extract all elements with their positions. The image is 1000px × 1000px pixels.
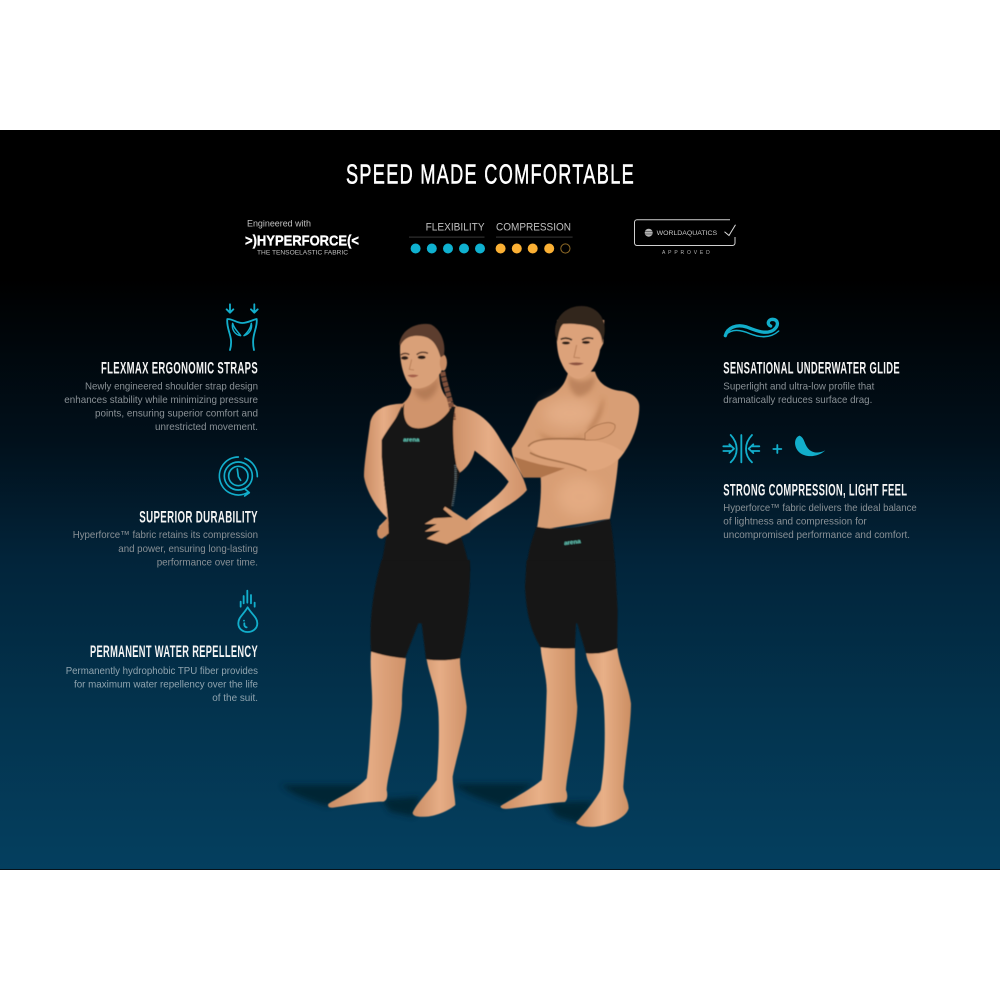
body text — [723, 382, 874, 406]
badge: World Aquatics approved: WORLDAQUATICS — [657, 230, 717, 237]
panel: underwater glide — [723, 319, 900, 406]
neck shadow — [568, 375, 595, 397]
body text: points, ensuring superior comfort and — [95, 408, 258, 420]
body text: and power, ensuring long-lasting — [118, 544, 258, 555]
hand over suit — [425, 507, 471, 544]
title: SPEED MADE COMFORTABLE — [346, 158, 635, 190]
body text: dramatically reduces surface drag. — [723, 395, 872, 406]
logo: Hyperforce: Engineered with — [247, 218, 311, 228]
body text: for maximum water repellency over the life — [74, 680, 258, 690]
body text: enhances stability while minimizing pressure — [64, 395, 258, 406]
front forearm — [528, 439, 624, 471]
panel: water repellency — [66, 591, 258, 704]
panel: superior durability — [73, 457, 258, 568]
badge: World Aquatics approved: APPROVED — [662, 250, 710, 256]
arena logo: arena — [403, 437, 420, 443]
panel: compression and light feel — [723, 435, 917, 541]
body text: Permanently hydrophobic TPU fiber provides — [66, 666, 258, 677]
rating: compression — [496, 222, 573, 254]
body text — [64, 382, 258, 433]
panel: flexmax straps — [64, 304, 258, 433]
face details — [561, 338, 593, 340]
badge: World Aquatics approved — [634, 220, 736, 256]
braid — [443, 372, 453, 420]
arena logo: arena — [564, 539, 582, 547]
rating: flexibility — [409, 222, 485, 254]
neck shadow — [413, 376, 439, 400]
hair — [399, 324, 444, 357]
hand — [585, 423, 615, 440]
body text: Superlight and ultra-low profile that — [723, 382, 874, 392]
body text — [723, 503, 917, 541]
face details — [401, 352, 428, 355]
icon: straps with arrows — [227, 304, 258, 350]
hair — [555, 306, 605, 343]
ear — [440, 355, 447, 371]
rating: flexibility: FLEXIBILITY — [426, 222, 485, 234]
icon: stopwatch — [219, 457, 257, 496]
icon: water drop — [238, 591, 257, 632]
dark gradient background band — [0, 130, 1000, 869]
figure: woman in racing suit — [364, 324, 527, 571]
suit top — [380, 403, 470, 571]
heading: FLEXMAX ERGONOMIC STRAPS — [101, 360, 258, 378]
floor shadows — [282, 784, 593, 823]
suit side panel — [452, 465, 456, 507]
body text: performance over time. — [157, 558, 258, 568]
body text — [73, 530, 258, 568]
torso and arms — [512, 372, 639, 531]
chest shadow — [538, 397, 604, 444]
neck and chest — [402, 368, 457, 433]
abdomen highlight — [557, 477, 603, 517]
heading: SUPERIOR DURABILITY — [139, 508, 258, 526]
logo: Hyperforce: >)HYPERFORCE(< — [245, 232, 359, 249]
forearm shadow — [528, 439, 587, 471]
icon: wave — [725, 319, 779, 337]
body text: of the suit. — [212, 693, 258, 704]
body text: Hyperforce™ fabric retains its compression — [73, 530, 258, 541]
head — [557, 320, 604, 379]
chest highlight — [543, 398, 597, 428]
rating: compression: COMPRESSION — [496, 222, 571, 234]
body text: uncompromised performance and comfort. — [723, 530, 910, 541]
lower forearm — [514, 457, 565, 478]
body text: Hyperforce™ fabric delivers the ideal balance — [723, 503, 917, 514]
figure: woman legs and shorts — [328, 560, 470, 817]
heading: PERMANENT WATER REPELLENCY — [90, 643, 258, 661]
body text: of lightness and compression for — [723, 516, 867, 528]
figure: man in jammer — [512, 306, 639, 571]
logo: Hyperforce — [245, 218, 359, 256]
body text: unrestricted movement. — [155, 422, 258, 433]
right arm — [450, 406, 527, 532]
body text — [66, 666, 258, 704]
figure: man legs and shorts — [501, 560, 631, 827]
shorts top — [527, 519, 615, 571]
body text: Newly engineered shoulder strap design — [85, 382, 258, 392]
head — [400, 331, 444, 388]
icon: compression plus feather — [723, 435, 825, 462]
logo: Hyperforce: THE TENSOELASTIC FABRIC — [257, 250, 348, 256]
left arm — [364, 404, 403, 539]
